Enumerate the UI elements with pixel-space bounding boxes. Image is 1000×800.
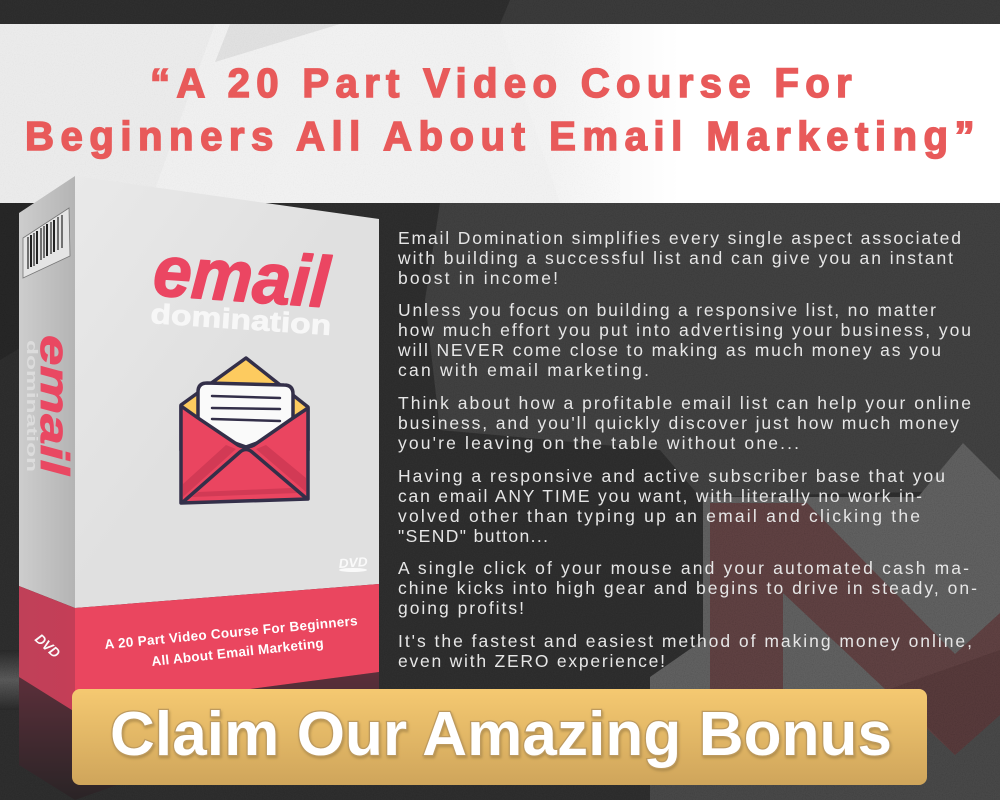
paragraph 2: can with email marketing. [398, 360, 649, 380]
title: Beginners All About Email Marketing” [25, 113, 975, 159]
paragraph 6: It's the fastest and easiest method of making money online, [398, 631, 972, 651]
body text [397, 228, 977, 671]
paragraph 4: Having a responsive and active subscriber base that you [398, 466, 945, 486]
envelope back flap [181, 358, 308, 450]
paragraph 3: business, and you'll quickly discover just how much money [398, 413, 959, 433]
box front red band [75, 584, 379, 712]
paragraph 2: how much effort you put into advertising your business, you [398, 320, 971, 340]
paragraph 5 [398, 558, 977, 618]
paragraph 1: boost in income! [398, 268, 558, 288]
front flap [183, 450, 306, 502]
lower right dark facet [650, 689, 1000, 800]
paragraph 6: even with ZERO experience! [398, 651, 665, 671]
paragraph 2: Unless you focus on building a responsive list, no matter [398, 300, 936, 320]
front logo: email: email [151, 231, 334, 323]
product box [19, 176, 379, 800]
paragraph 5: going profits! [398, 598, 524, 618]
box side red band [19, 586, 75, 712]
box front face [75, 176, 379, 608]
paragraph 4: "SEND" button... [398, 526, 548, 546]
call to action button [72, 689, 927, 785]
barcode label [23, 208, 70, 278]
box side face [19, 176, 75, 608]
paragraph 4 [398, 466, 945, 546]
title: “A 20 Part Video Course For [150, 60, 852, 106]
paragraph 2 [397, 300, 971, 380]
paragraph 3: Think about how a profitable email list can help your online [398, 393, 971, 413]
paragraph 4: volved other than typing up an email and clicking the [398, 506, 920, 526]
paragraph 3: you're leaving on the table without one... [398, 433, 799, 453]
paragraph 4: can email ANY TIME you want, with literally no work in- [398, 486, 922, 506]
dvd mark side: DVD [32, 630, 64, 661]
envelope icon [181, 358, 308, 503]
paragraph 1: with building a successful list and can give you an instant [397, 248, 953, 268]
paragraph 3 [398, 393, 971, 453]
side logo: domination: domination [23, 340, 40, 472]
white title banner [0, 24, 1000, 203]
paragraph 5: chine kicks into high gear and begins to drive in steady, on- [398, 578, 977, 598]
side logo: email: email [32, 335, 76, 476]
front logo: domination: domination [150, 298, 332, 341]
band text: A 20 Part Video Course For Beginners [104, 613, 358, 652]
grey polygon behind text [650, 443, 1000, 800]
button label: Claim Our Amazing Bonus [110, 700, 892, 769]
title [25, 60, 975, 159]
box reflection [19, 672, 379, 800]
band text: All About Email Marketing [151, 635, 324, 669]
band text [104, 613, 358, 669]
paragraph 6 [398, 631, 972, 671]
paragraph 5: A single click of your mouse and your automated cash ma- [398, 558, 969, 578]
paragraph 1 [397, 228, 961, 288]
maroon N shape [710, 503, 1000, 755]
paragraph 1: Email Domination simplifies every single aspect associated [398, 228, 961, 248]
envelope body [181, 406, 308, 503]
dvd mark front: DVD [338, 554, 369, 571]
side shading [183, 445, 236, 497]
paragraph 2: will NEVER come close to making as much money as you [397, 340, 941, 360]
letter [198, 383, 293, 447]
